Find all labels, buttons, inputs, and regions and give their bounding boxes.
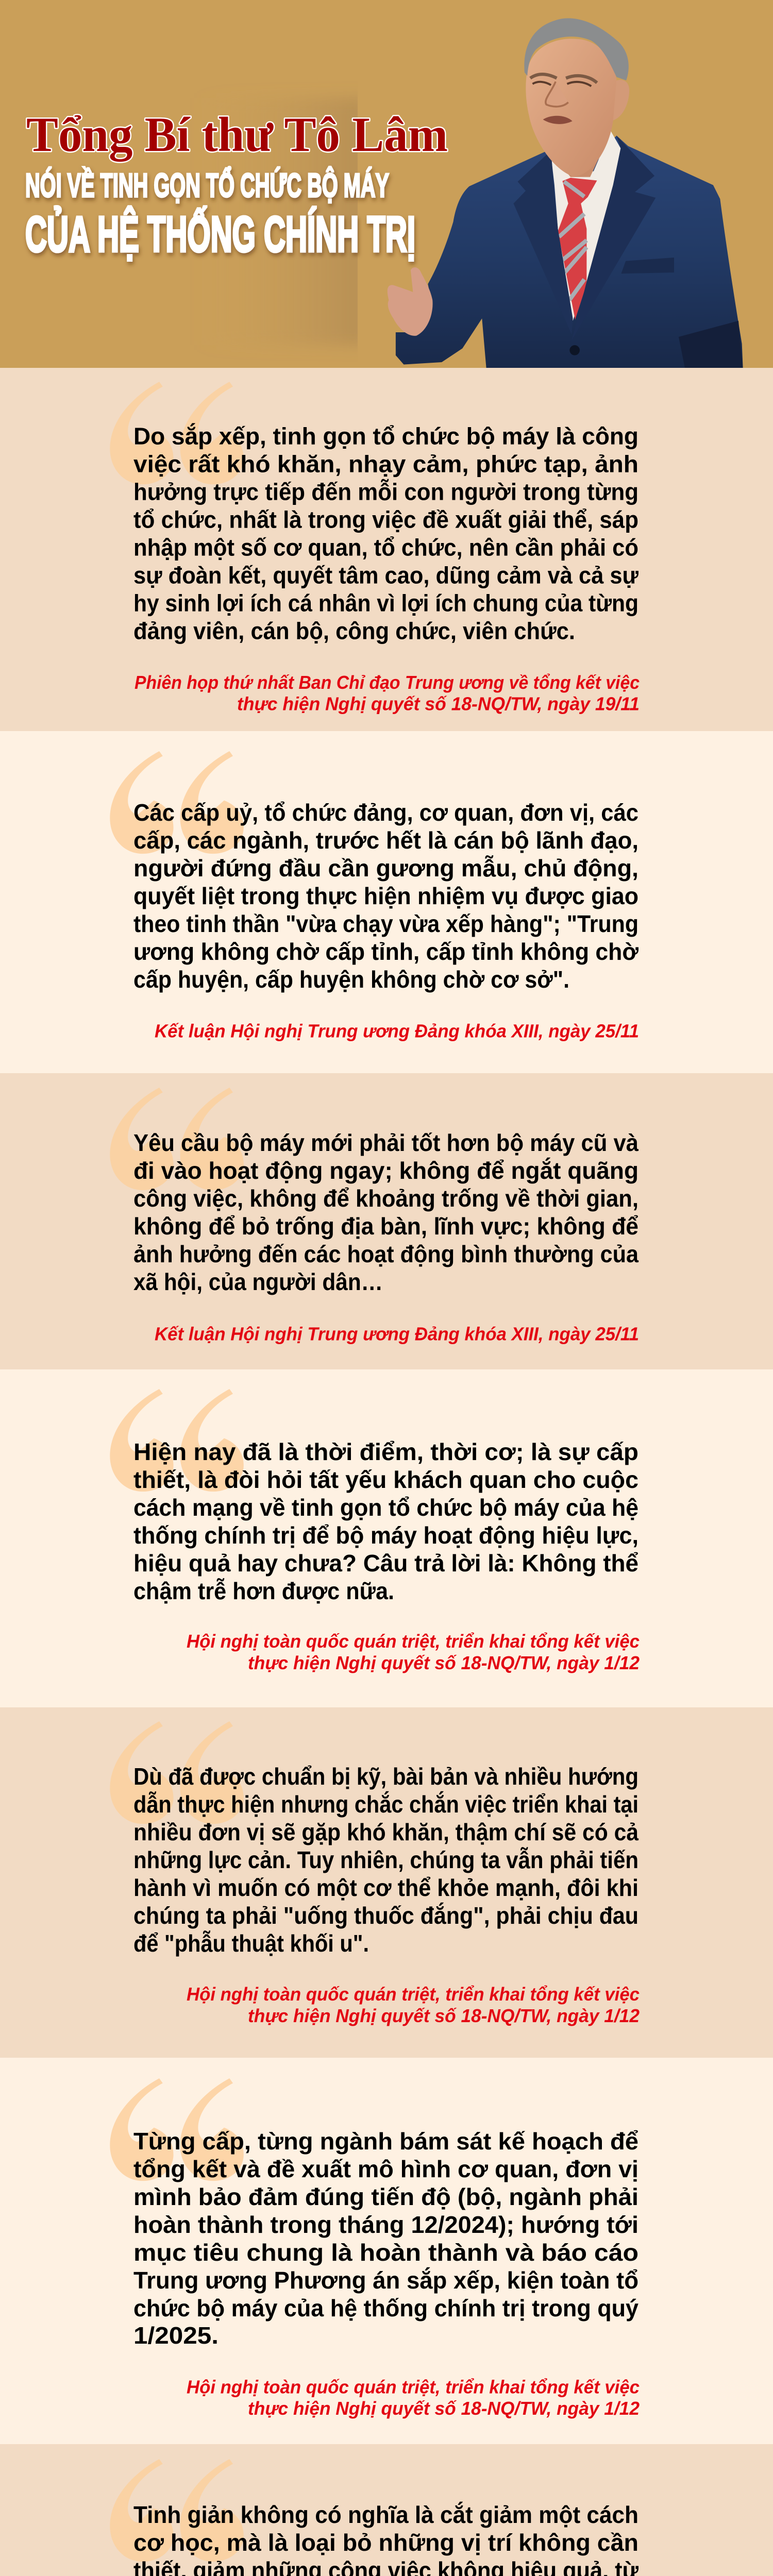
quote text [133,1763,638,1957]
quote text: Yêu cầu bộ máy mới phải tốt hơn bộ máy cũ và [133,1129,638,1156]
quote text: Từng cấp, từng ngành bám sát kế hoạch để [133,2128,638,2155]
attribution: Hội nghị toàn quốc quán triệt, triển khai tổng kết việc [187,1984,640,2005]
quote text: quyết liệt trong thực hiện nhiệm vụ được giao [133,883,638,909]
quote text: hành vì muốn có một cơ thể khỏe mạnh, đôi khi [133,1874,638,1901]
panel: quote 5 [0,1707,773,2058]
quote text [133,422,639,644]
attribution: Kết luận Hội nghị Trung ương Đảng khóa XIII, ngày 25/11 [155,1323,639,1345]
quote text: người đứng đầu cần gương mẫu, chủ động, [133,855,638,882]
attribution: Hội nghị toàn quốc quán triệt, triển khai tổng kết việc [187,2376,640,2398]
title line 3: CỦA HỆ THỐNG CHÍNH TRỊ [25,206,415,262]
quote text: không để bỏ trống địa bàn, lĩnh vực; không để [133,1213,638,1240]
quote text: cơ học, mà là loại bỏ những vị trí không cần [133,2529,638,2556]
attribution: thực hiện Nghị quyết số 18-NQ/TW, ngày 1/12 [248,2398,640,2419]
panel: quote 3 [0,1073,773,1369]
quote text: Trung ương Phương án sắp xếp, kiện toàn tổ [133,2267,638,2294]
necktie [558,178,597,319]
panel: hero banner [0,0,773,371]
quote text: ảnh hưởng đến các hoạt động bình thường của [133,1241,638,1267]
quote text: đi vào hoạt động ngay; không để ngắt quãng [133,1157,638,1184]
panel: quote 4 [0,1369,773,1707]
gesturing hand [388,267,433,336]
quote text [133,2501,639,2576]
ear [612,80,629,121]
quote text: chúng ta phải "uống thuốc đắng", phải chịu đau [133,1902,638,1929]
attribution: thực hiện Nghị quyết số 18-NQ/TW, ngày 19/11 [237,693,640,714]
quote text: thiết, là đòi hỏi tất yếu khách quan cho cuộc [133,1466,638,1493]
quote text: Dù đã được chuẩn bị kỹ, bài bản và nhiều hướng [133,1763,638,1790]
quote text [133,1129,638,1295]
quote text: nhập một số cơ quan, tổ chức, nên cần phải có [133,534,638,561]
quote text [133,1438,638,1604]
quote text: tổng kết và đề xuất mô hình cơ quan, đơn vị [133,2156,638,2182]
quote text: cách mạng về tinh gọn tổ chức bộ máy của hệ [133,1494,638,1521]
icon: opening quote mark [110,2078,244,2181]
quote text: Do sắp xếp, tinh gọn tổ chức bộ máy là công [133,422,638,449]
quote text: mục tiêu chung là hoàn thành và báo cáo [133,2239,638,2266]
quote text: sự đoàn kết, quyết tâm cao, dũng cảm và cả sự [133,562,639,588]
attribution: thực hiện Nghị quyết số 18-NQ/TW, ngày 1/12 [248,1652,640,1673]
title [25,107,448,262]
icon: opening quote mark [110,382,244,484]
quote text: Tinh giản không có nghĩa là cắt giảm một cách [133,2501,638,2528]
title line 2: NÓI VỀ TINH GỌN TỔ CHỨC BỘ MÁY [25,166,389,204]
quote text: công việc, không để khoảng trống về thời gian, [133,1185,638,1212]
quote text: cấp huyện, cấp huyện không chờ cơ sở". [133,966,569,993]
icon: opening quote mark [110,1088,244,1190]
quote text [133,799,638,993]
title line 1: Tổng Bí thư Tô Lâm [26,107,448,162]
neck [568,132,611,177]
attribution [187,1984,640,2026]
face [526,39,616,176]
shirt [551,131,620,321]
attribution: Phiên họp thứ nhất Ban Chỉ đạo Trung ương về tổng kết việc [135,672,640,693]
portrait: speaker in navy suit [388,18,743,371]
quote text: hoàn thành trong tháng 12/2024); hướng tới [133,2211,638,2238]
icon: opening quote mark [110,751,244,854]
quote text: việc rất khó khăn, nhạy cảm, phức tạp, ảnh [133,450,638,477]
quote text: hiệu quả hay chưa? Câu trả lời là: Không thể [133,1550,638,1577]
blurred background wall [306,98,358,345]
breast pocket and button [569,258,674,355]
quote text: xã hội, của người dân… [133,1268,383,1295]
attribution [187,1631,640,1673]
quote text: những lực cản. Tuy nhiên, chúng ta vẫn phải tiến [133,1846,638,1873]
quote text: mình bảo đảm đúng tiến độ (bộ, ngành phải [133,2183,638,2210]
quote text: thống chính trị để bộ máy hoạt động hiệu lực, [133,1522,638,1549]
panel: quote 1 [0,368,773,731]
quote text: dẫn thực hiện nhưng chắc chắn việc triển khai tại [133,1791,638,1818]
attribution: Kết luận Hội nghị Trung ương Đảng khóa XIII, ngày 25/11 [155,1020,639,1042]
quote text: hưởng trực tiếp đến mỗi con người trong từng [133,478,638,505]
attribution: thực hiện Nghị quyết số 18-NQ/TW, ngày 1/12 [248,2005,640,2026]
icon: opening quote mark [110,2459,244,2562]
quote text: tổ chức, nhất là trong việc đề xuất giải thể, sáp [133,506,638,533]
left lapel [513,150,573,334]
quote text: chức bộ máy của hệ thống chính trị trong quý [133,2295,638,2321]
quote text: Hiện nay đã là thời điểm, thời cơ; là sự cấp [133,1438,638,1465]
panel: quote 6 [0,2058,773,2444]
quote text: nhiều đơn vị sẽ gặp khó khăn, thậm chí sẽ có cả [133,1819,638,1845]
right lapel [583,136,656,295]
quote text: hy sinh lợi ích cá nhân vì lợi ích chung của từng [133,589,638,616]
quote text: Các cấp uỷ, tổ chức đảng, cơ quan, đơn vị, các [133,799,638,826]
quote text: để "phẫu thuật khối u". [133,1930,369,1957]
quote text: theo tinh thần "vừa chạy vừa xếp hàng"; "Trung [133,910,638,937]
hair [524,18,629,80]
hero background [0,0,773,368]
quote text: ương không chờ cấp tỉnh, cấp tỉnh không chờ [133,938,638,965]
quote text: cấp, các ngành, trước hết là cán bộ lãnh đạo, [133,827,638,854]
panel: quote 2 [0,731,773,1073]
quote text: 1/2025. [133,2322,219,2349]
icon: opening quote mark [110,1721,244,1824]
attribution: Hội nghị toàn quốc quán triệt, triển khai tổng kết việc [187,1631,640,1652]
attribution [187,2376,640,2419]
facial features [530,74,597,124]
quote text: chậm trễ hơn được nữa. [133,1578,394,1604]
panel: quote 7 [0,2444,773,2576]
attribution [135,672,640,714]
quote text: đảng viên, cán bộ, công chức, viên chức. [133,617,575,644]
quote text [133,2128,638,2349]
sleeve shadow [679,321,743,371]
icon: opening quote mark [110,1389,244,1492]
suit jacket [396,135,743,371]
